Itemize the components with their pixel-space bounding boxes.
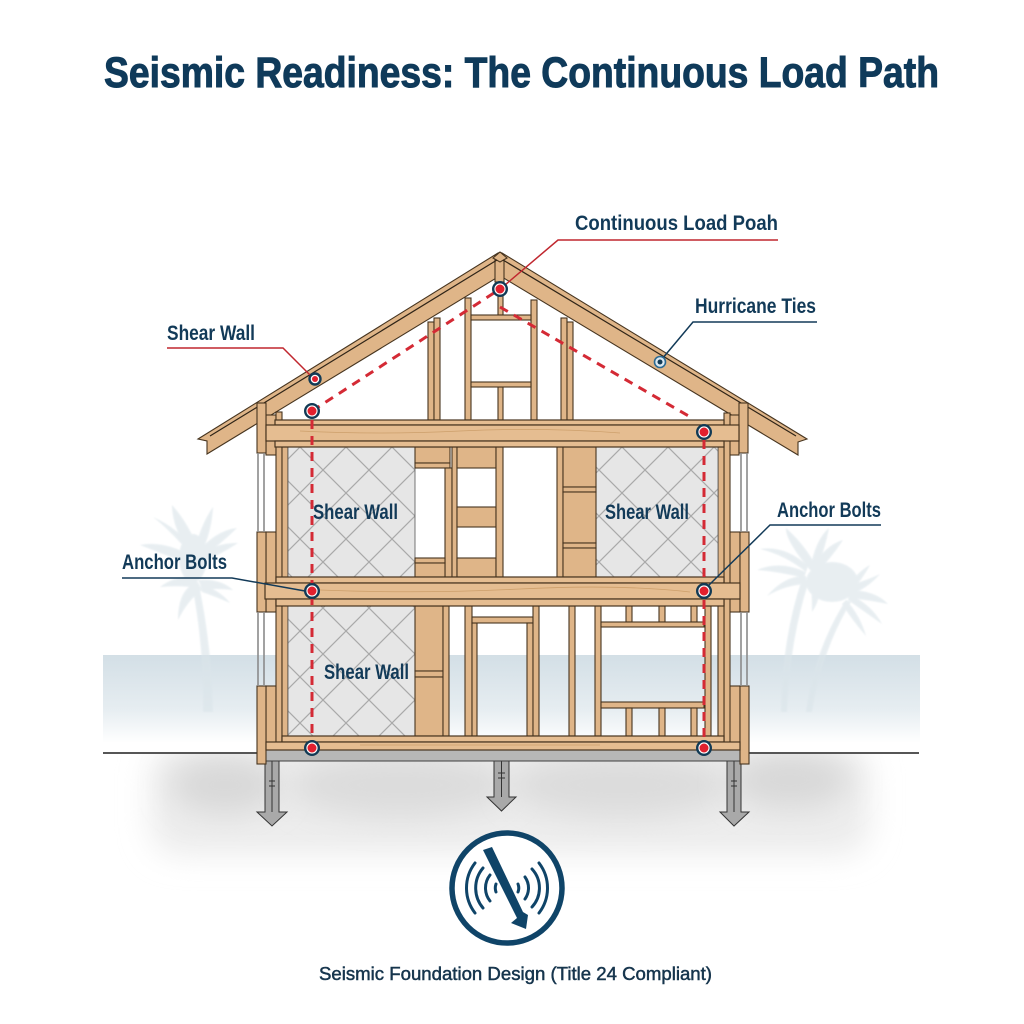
leader: anchor bolts right (708, 525, 881, 586)
label: hurricane ties: Hurricane Ties (695, 295, 816, 318)
marker: base left (305, 741, 319, 755)
label: shear wall upper right: Shear Wall (605, 501, 689, 524)
label: shear wall callout: Shear Wall (167, 322, 255, 345)
bottom sill plates (266, 736, 740, 750)
roof rafters (198, 252, 807, 455)
marker: rafter shear wall (310, 374, 320, 384)
palm tree left (140, 505, 238, 712)
leader: hurricane ties (662, 322, 817, 359)
shear wall panel upper left (288, 447, 415, 577)
attic studs (428, 295, 573, 420)
continuous load path dashed line (312, 289, 704, 748)
marker: hurricane tie (654, 356, 666, 368)
sea band backdrop (103, 655, 920, 753)
icon: seismic waves with arrow (452, 833, 562, 943)
upper floor framing (415, 447, 596, 577)
leader: continuous load path (505, 240, 778, 285)
mid floor beam (265, 577, 740, 606)
marker: apex (493, 282, 507, 296)
lower floor framing (415, 606, 711, 736)
marker: eave right (697, 425, 711, 439)
label: shear wall lower left: Shear Wall (324, 661, 409, 684)
label: anchor bolts left: Anchor Bolts (122, 551, 227, 574)
leader: shear wall (167, 348, 311, 376)
wood grain (300, 429, 690, 745)
leader: anchor bolts left (122, 578, 305, 591)
house timber frame (198, 252, 807, 826)
marker: eave left (305, 404, 319, 418)
shear wall panel lower left (288, 606, 415, 736)
label: shear wall upper left: Shear Wall (313, 501, 398, 524)
label: anchor bolts right: Anchor Bolts (777, 499, 881, 522)
caption: Seismic Foundation Design (Title 24 Compliant) (319, 963, 712, 984)
left wall posts (257, 403, 288, 764)
ground line (103, 752, 919, 754)
label: continuous load path: Continuous Load Poah (575, 212, 778, 235)
shear wall panel upper right (596, 447, 718, 577)
marker: base right (697, 741, 711, 755)
marker: mid floor left (305, 584, 319, 598)
concrete footing (266, 750, 740, 761)
ceiling beam (266, 420, 739, 447)
right wall posts (718, 403, 749, 764)
left side window strips (258, 453, 264, 686)
connection markers (305, 282, 711, 755)
rafter inner lines (210, 260, 796, 436)
palm trees right (757, 528, 888, 712)
ground shading (150, 745, 870, 855)
right side window strips (741, 453, 747, 686)
marker: mid floor right (697, 584, 711, 598)
foundation piles (257, 761, 749, 826)
